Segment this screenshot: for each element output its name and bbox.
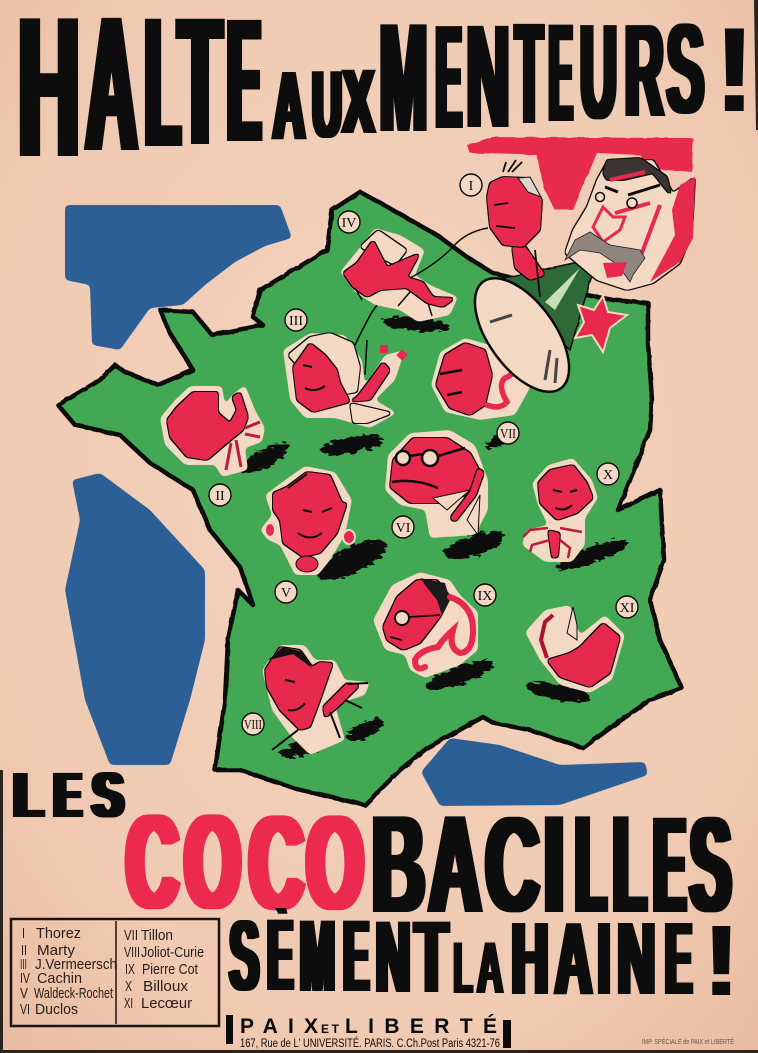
legend of names: Waldeck-Rochet — [34, 985, 114, 1002]
roman numeral markers: VIII — [244, 718, 262, 733]
word SEMENT: E — [344, 899, 369, 1013]
word SEMENT: M — [300, 899, 335, 1013]
legend of names: II — [21, 942, 27, 959]
roman numeral markers — [209, 174, 638, 735]
word SEMENT: N — [376, 900, 410, 1014]
legend of names: J.Vermeersch — [35, 956, 117, 973]
legend of names: XI — [124, 995, 133, 1012]
microbe VII Tillon — [431, 335, 545, 420]
legend of names: Marty — [37, 942, 76, 959]
microbe V Waldeck-Rochet — [260, 466, 355, 575]
Stalin caricature — [565, 158, 695, 290]
legend of names: IV — [20, 970, 30, 987]
word HAINE and exclamation: ! — [707, 905, 735, 1017]
word BACILLES: A — [429, 787, 481, 942]
word HAINE and exclamation: E — [665, 901, 692, 1016]
legend of names: III — [20, 956, 27, 973]
word HAINE and exclamation — [512, 901, 735, 1017]
word COCO: C — [250, 789, 303, 938]
thread between Thorez and microbes — [410, 228, 488, 278]
roman numeral markers: I — [469, 179, 474, 194]
microbe III Vermeersch — [283, 290, 408, 428]
legend of names: Duclos — [35, 1001, 78, 1018]
legend of names: Joliot-Curie — [141, 944, 204, 961]
megaphone — [457, 258, 597, 408]
word SEMENT — [228, 908, 450, 992]
title word MENTEURS: U — [580, 0, 617, 147]
word BACILLES: B — [372, 787, 425, 942]
word SEMENT: S — [230, 900, 259, 1012]
publisher block — [226, 1015, 511, 1050]
word LES: E — [54, 759, 81, 831]
word LES: L — [14, 759, 43, 831]
title word MENTEURS — [380, 0, 704, 164]
word BACILLES: I — [544, 787, 564, 942]
legend of names: Pierre Cot — [142, 961, 199, 978]
microbe X Billoux — [522, 458, 598, 562]
roman numeral markers: IX — [478, 589, 492, 604]
legend of names: Cachin — [37, 970, 82, 987]
legend of names: IX — [125, 961, 135, 978]
roman numeral markers: XI — [620, 601, 635, 616]
word HAINE and exclamation: N — [617, 901, 655, 1016]
legend of names: VII — [124, 927, 138, 944]
word LES — [14, 759, 123, 831]
legend of names: VI — [20, 1001, 30, 1018]
roman numeral markers: III — [289, 314, 303, 329]
map of France with seas — [58, 137, 693, 806]
word COCO: C — [127, 788, 178, 937]
word LES: S — [92, 759, 123, 831]
title word AUX — [273, 51, 374, 160]
publisher block: 167, Rue de L' UNIVERSITÉ. PARIS. C.Ch.Post Paris 4321-76 — [240, 1037, 500, 1050]
word COCO: O — [307, 789, 363, 938]
microbe IV Cachin — [340, 228, 458, 322]
roman numeral markers: IV — [342, 216, 356, 231]
word BACILLES: E — [654, 789, 685, 942]
word HAINE and exclamation: A — [555, 901, 592, 1016]
legend of names — [11, 919, 219, 1026]
legend of names: Thorez — [36, 925, 81, 942]
word BACILLES — [372, 787, 731, 942]
red star — [575, 296, 627, 352]
sea: English Channel — [65, 205, 292, 350]
megaphone cone — [495, 258, 597, 350]
legend of names: Billoux — [143, 978, 189, 995]
microbe XI Lecoeur — [525, 605, 625, 693]
legend of names: I — [22, 925, 25, 942]
word SEMENT: T — [415, 900, 448, 1014]
poster bottom edge — [0, 1050, 758, 1053]
headline LES COCOBACILLES — [14, 759, 731, 942]
roman numeral markers: VII — [500, 427, 516, 442]
title word AUX: U — [312, 51, 342, 158]
title word AUX: A — [273, 51, 305, 160]
roman numeral markers: II — [215, 489, 225, 504]
word COCO: O — [185, 788, 240, 937]
title: S — [667, 0, 704, 141]
word BACILLES: L — [613, 787, 646, 942]
title word MENTEURS: R — [625, 0, 664, 144]
word SEMENT: È — [268, 898, 293, 1012]
sea: Mediterranean — [421, 738, 648, 806]
legend of names: VIII — [124, 944, 140, 961]
legend of names: Lecœur — [141, 995, 192, 1012]
word HAINE and exclamation: I — [598, 901, 610, 1016]
microbe II Marty — [160, 385, 265, 477]
publisher block: PAIX — [240, 1015, 318, 1038]
roman numeral markers: V — [281, 586, 291, 601]
headline SEMENT LA HAINE: A — [477, 928, 503, 1009]
title word AUX: X — [343, 51, 374, 153]
publisher block: LIBERTÉ — [345, 1015, 497, 1038]
microbe VIII Joliot-Curie — [262, 645, 370, 755]
word HAINE and exclamation: H — [512, 901, 548, 1016]
megaphone bell — [457, 262, 587, 408]
publisher block: ET — [321, 1022, 340, 1036]
red flag shape behind Stalin — [467, 137, 693, 210]
microbe IX Pierre Cot — [373, 572, 478, 678]
word COCO — [127, 788, 363, 938]
word LA: L — [454, 928, 472, 1009]
legend of names: Tillon — [141, 927, 173, 944]
roman numeral markers: VI — [396, 521, 411, 536]
hatch shadows on the map — [236, 314, 630, 761]
France territory — [58, 192, 682, 805]
word BACILLES: L — [576, 787, 606, 942]
Thorez caricature — [487, 160, 545, 297]
title — [18, 0, 750, 199]
microbe VI Duclos — [385, 430, 488, 538]
legend of names: V — [20, 985, 28, 1002]
legend of names: X — [125, 978, 132, 995]
headline SEMENT LA HAINE — [228, 908, 730, 995]
roman numeral markers: X — [603, 468, 613, 483]
title word HALTE — [18, 0, 260, 199]
word BACILLES: C — [486, 789, 539, 940]
sea: Atlantic — [65, 473, 205, 765]
